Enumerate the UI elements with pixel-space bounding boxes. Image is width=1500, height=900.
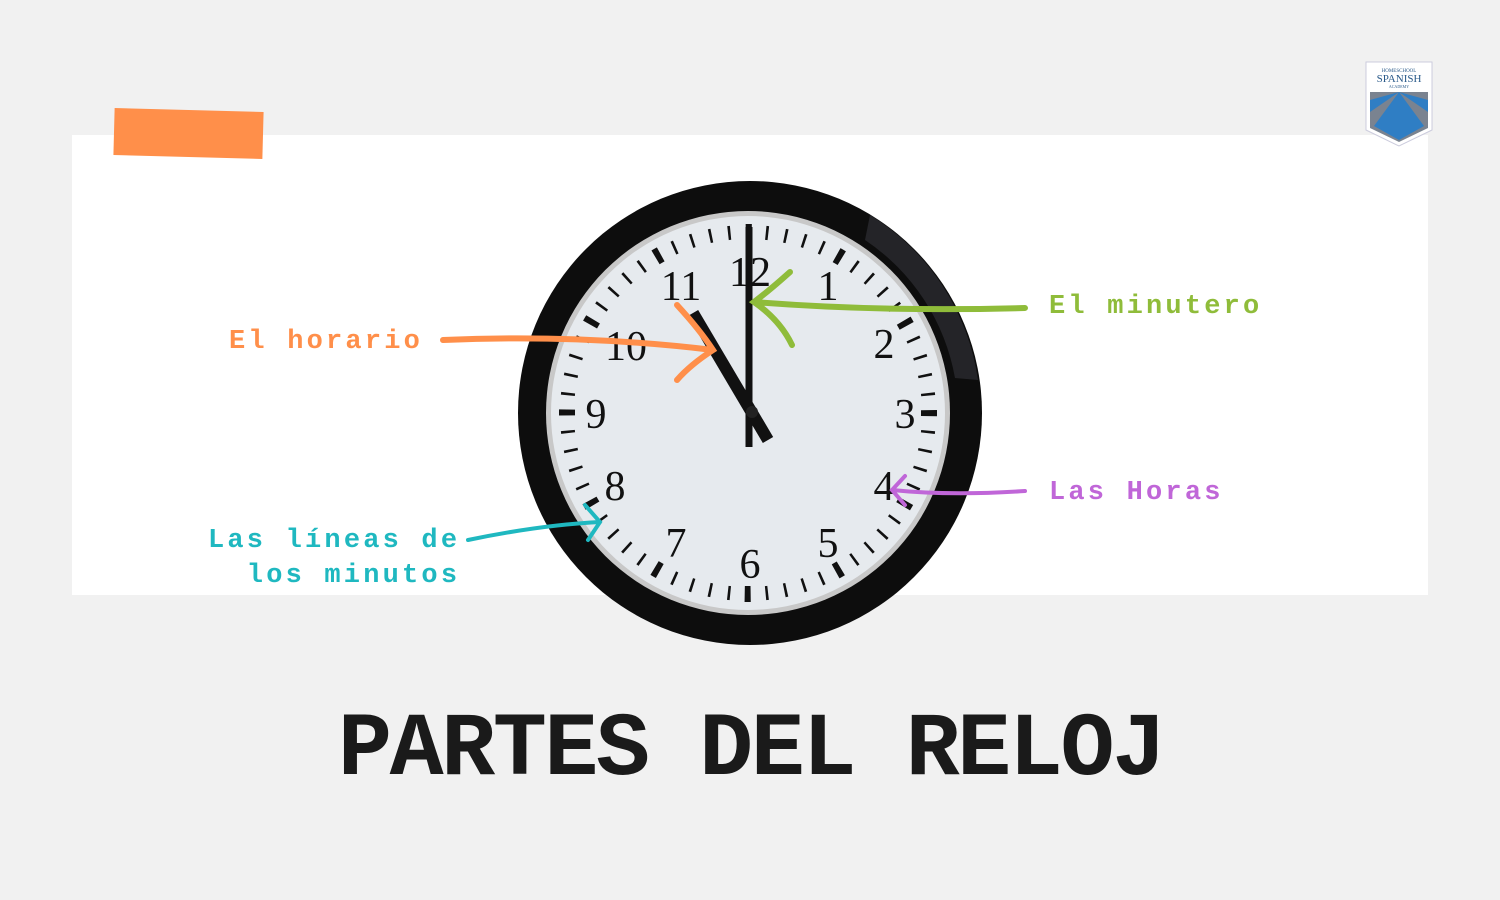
clock: 5	[818, 521, 838, 567]
label: El minutero: El minutero	[1049, 292, 1262, 322]
clock: 4	[874, 464, 894, 510]
logo: ACADEMY	[1389, 84, 1409, 89]
logo: SPANISH	[1377, 73, 1421, 85]
logo: HOMESCHOOL	[1382, 69, 1416, 74]
label: Las lineas de los minutos: Las líneas de	[208, 526, 460, 556]
clock: 1	[818, 264, 838, 310]
logo	[1366, 62, 1432, 146]
clock: 7	[666, 521, 686, 567]
clock: 12	[729, 250, 771, 296]
clock: 3	[894, 392, 916, 438]
orange tape	[113, 108, 264, 159]
label: Las Horas: Las Horas	[1049, 478, 1224, 508]
clock: 10	[605, 324, 647, 370]
clock: 2	[874, 322, 894, 368]
label: Las lineas de los minutos: los minutos	[247, 561, 460, 591]
clock: 11	[661, 264, 701, 310]
clock: 9	[586, 392, 606, 438]
label: Las lineas de los minutos	[208, 526, 460, 591]
label: El horario: El horario	[229, 327, 423, 357]
title: PARTES DEL RELOJ	[338, 700, 1164, 802]
clock: 6	[740, 542, 760, 588]
clock: 8	[604, 464, 626, 510]
white panel	[72, 135, 1428, 595]
